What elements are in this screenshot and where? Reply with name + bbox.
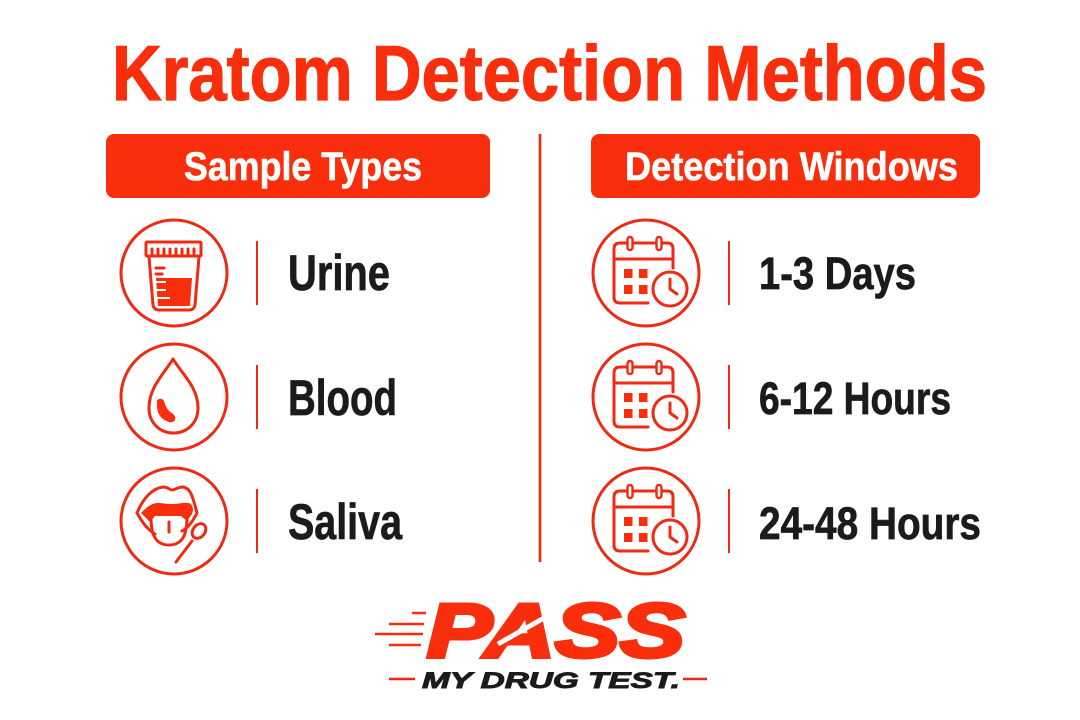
icon: mouth and swab <box>121 468 227 574</box>
heading: detection windows <box>591 134 980 198</box>
divider tick <box>728 365 730 429</box>
heading: sample types <box>106 134 490 198</box>
row: urine <box>121 220 390 326</box>
divider tick <box>728 489 730 553</box>
divider tick <box>256 489 258 553</box>
row: saliva <box>121 468 403 574</box>
center divider <box>539 134 541 562</box>
row: 1-3 days <box>593 220 916 326</box>
divider tick <box>256 365 258 429</box>
title: Kratom Detection Methods <box>112 29 987 117</box>
row: blood <box>121 344 397 450</box>
label: urine: Urine <box>288 245 390 301</box>
row: 24-48 hours <box>593 468 981 574</box>
label: 6-12 hours: 6-12 Hours <box>759 373 951 424</box>
label: 24-48 hours: 24-48 Hours <box>759 498 981 549</box>
heading: sample types: Sample Types <box>184 145 422 189</box>
icon: calendar with clock <box>593 220 699 326</box>
logo slash through A <box>498 618 544 644</box>
icon: urine cup <box>121 220 227 326</box>
icon: calendar with clock <box>593 468 699 574</box>
panel: sample types <box>106 134 490 574</box>
icon: blood drop <box>121 344 227 450</box>
label: 1-3 days: 1-3 Days <box>759 248 916 299</box>
logo wordmark: pass: PASS <box>427 589 685 674</box>
row: 6-12 hours <box>593 344 951 450</box>
speed lines <box>375 613 426 645</box>
logo tagline: MY DRUG TEST. <box>422 668 680 693</box>
divider tick <box>728 241 730 305</box>
logo: pass my drug test <box>375 589 707 693</box>
heading: detection windows: Detection Windows <box>625 145 958 189</box>
icon: calendar with clock <box>593 344 699 450</box>
label: blood: Blood <box>288 370 397 426</box>
tagline side lines <box>389 678 707 680</box>
panel: detection windows <box>591 134 981 574</box>
label: saliva: Saliva <box>288 494 403 550</box>
divider tick <box>256 241 258 305</box>
